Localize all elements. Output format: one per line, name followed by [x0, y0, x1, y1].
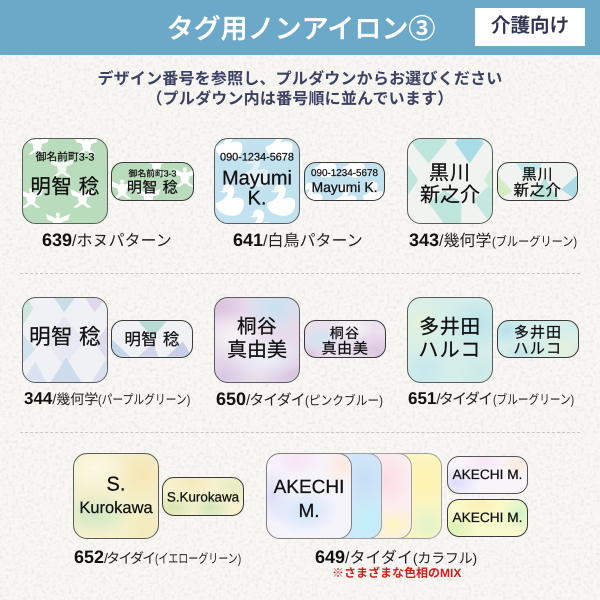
- caption 344: (パープルグリーン): [98, 392, 191, 407]
- caption 344: [24, 389, 191, 408]
- large tag 343: 黒川: [429, 163, 471, 185]
- large tag 343: [407, 138, 493, 224]
- instructions text: （プルダウン内は番号順に並んでいます）: [146, 90, 454, 108]
- item 639: [22, 138, 194, 250]
- caption 641: 641/白鳥パターン: [233, 230, 363, 250]
- small tag 650: 真由美: [321, 341, 369, 358]
- small tag 639: [111, 162, 194, 201]
- caption 650: [216, 389, 383, 409]
- caption 652: [74, 547, 242, 567]
- large tag 641: K.: [248, 188, 266, 210]
- caption 343: 343/幾何学: [409, 230, 492, 250]
- caption 639: 639/ホヌパターン: [42, 230, 172, 250]
- large tag 650: 真由美: [227, 340, 287, 362]
- item 650: [214, 297, 386, 409]
- small tag 649 yellow green: AKECHI M.: [453, 510, 522, 525]
- large tag 344: 明智 稔: [29, 325, 101, 349]
- large tag 651: 多井田: [419, 317, 481, 339]
- small tag 344: 明智 稔: [124, 331, 180, 349]
- caption 344: 344/幾何学: [24, 389, 98, 408]
- small tag 651: ハルコ: [513, 341, 563, 358]
- caption 649: (カラフル): [413, 550, 477, 566]
- small tag 649 lilac: AKECHI M.: [453, 467, 522, 482]
- item 649: [266, 453, 528, 580]
- small tag 641: [304, 162, 385, 201]
- caption 650: (ピンクブルー): [305, 393, 383, 408]
- caption 649: [315, 547, 477, 567]
- large tag 651: ハルコ: [418, 340, 482, 362]
- large tag 641: 090-1234-5678: [220, 151, 294, 163]
- small tag 652: [162, 477, 244, 516]
- caption 652: (イエローグリーン): [155, 551, 242, 566]
- badge: 介護向け: [475, 8, 585, 46]
- small tag 639: 御名前町3-3: [129, 168, 176, 178]
- swatch: yellow green: [356, 453, 442, 539]
- small tag 649 lilac: [447, 456, 528, 494]
- item 652: [73, 453, 244, 567]
- small tag 639: 明智 稔: [127, 180, 178, 197]
- small tag 343: [497, 162, 578, 201]
- caption 343: (ブルーグリーン): [492, 234, 577, 249]
- item 651: [407, 297, 579, 408]
- caption 651: 651/タイダイ: [408, 389, 491, 408]
- large tag 344: [22, 297, 108, 383]
- small tag 651: 多井田: [514, 325, 562, 342]
- caption 343: [409, 230, 577, 250]
- small tag 651: [497, 320, 579, 358]
- instructions text: デザイン番号を参照し、プルダウンからお選びください: [97, 71, 502, 88]
- swatch: blue: [296, 453, 382, 539]
- instructions text: [97, 70, 502, 108]
- large tag 649: AKECHI: [274, 477, 344, 498]
- large tag 639: 明智 稔: [30, 175, 100, 198]
- small tag 652: S.Kurokawa: [167, 489, 239, 504]
- caption 651: (ブルーグリーン): [493, 392, 575, 407]
- caption 652: 652/タイダイ: [74, 547, 154, 567]
- large tag 652: Kurokawa: [79, 499, 153, 517]
- large tag 639: [22, 138, 108, 224]
- small tag 343: 黒川: [522, 167, 553, 184]
- large tag 343: 新之介: [420, 185, 480, 207]
- large tag 652: [73, 453, 159, 539]
- large tag 641: [214, 138, 300, 224]
- large tag 652: S.: [107, 474, 125, 496]
- title: タグ用ノンアイロン③: [167, 14, 435, 44]
- large tag 649: [266, 453, 352, 539]
- badge: 介護向け: 介護向け: [491, 15, 569, 37]
- large tag 641: Mayumi: [222, 168, 292, 190]
- caption 650: 650/タイダイ: [216, 389, 305, 409]
- note: colour mix: ※さまざまな色相のMIX: [332, 566, 461, 580]
- large tag 649: M.: [298, 501, 320, 522]
- small tag 641: Mayumi K.: [311, 179, 378, 195]
- caption 651: [408, 389, 575, 408]
- small tag 641: 090-1234-5678: [311, 168, 378, 179]
- small tag 344: [111, 320, 193, 358]
- small tag 343: 新之介: [513, 182, 562, 199]
- small tag 649 yellow green: [447, 499, 528, 537]
- header band: [0, 0, 600, 55]
- item 641: [214, 138, 385, 250]
- large tag 650: 桐谷: [237, 316, 277, 338]
- large tag 651: [407, 297, 493, 383]
- large tag 639: 御名前町3-3: [36, 151, 94, 163]
- caption 649: 649/タイダイ: [315, 547, 413, 567]
- swatch: pink: [326, 453, 412, 539]
- small tag 650: [304, 320, 386, 358]
- large tag 650: [214, 297, 300, 383]
- item 344: [22, 297, 193, 408]
- item 343: [407, 138, 578, 250]
- small tag 650: 桐谷: [330, 325, 360, 341]
